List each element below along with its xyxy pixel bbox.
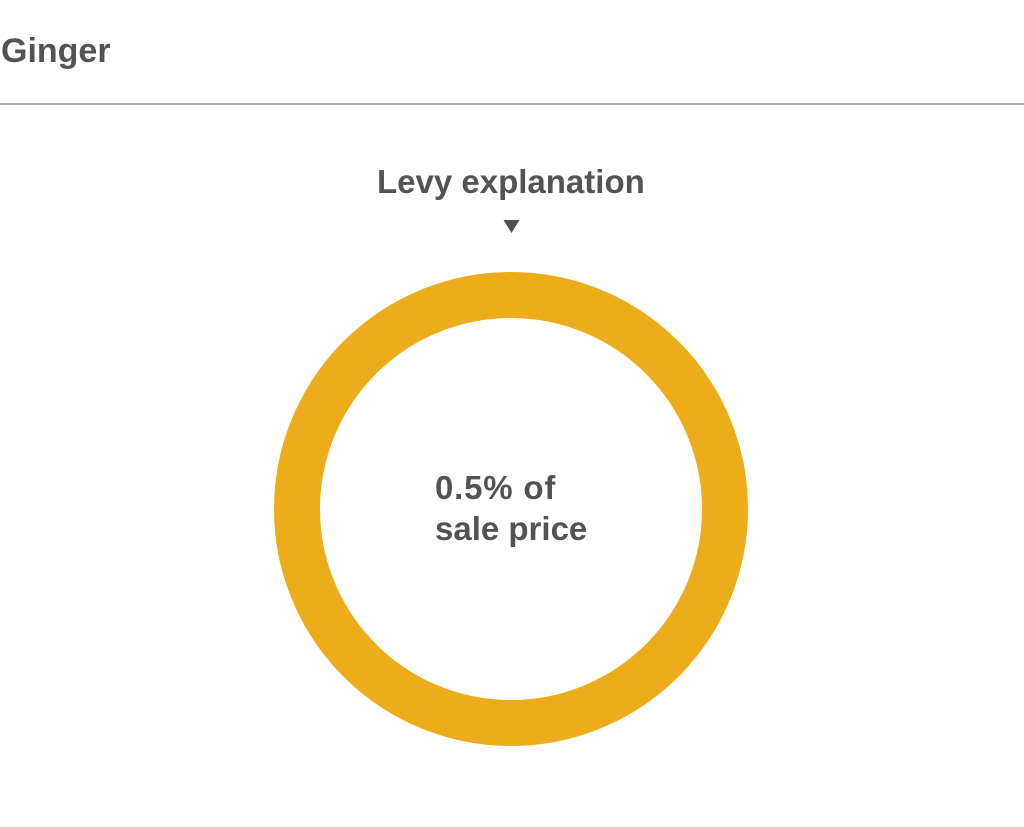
ring label: 0.5% of bbox=[435, 469, 556, 506]
title: Ginger bbox=[1, 32, 111, 70]
chart: levy ring bbox=[274, 272, 748, 746]
icon: down arrow bbox=[504, 220, 520, 233]
header rule bbox=[0, 103, 1024, 105]
ring label bbox=[435, 469, 587, 547]
ring label: sale price bbox=[435, 510, 587, 547]
heading: levy explanation: Levy explanation bbox=[377, 163, 645, 200]
